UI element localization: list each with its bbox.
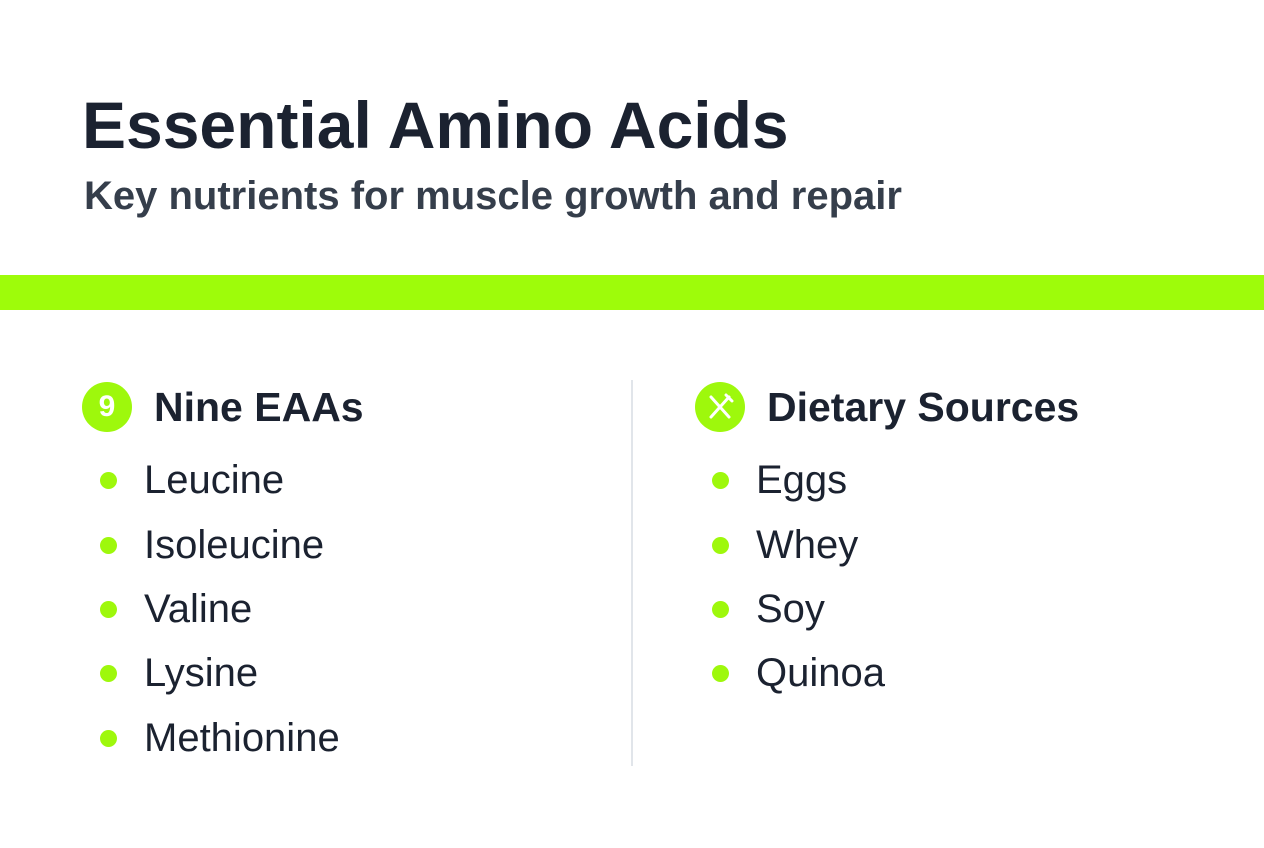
list: amino acids: Isoleucine — [144, 523, 324, 567]
heading: Nine EAAs: Nine EAAs — [154, 384, 364, 430]
heading: Dietary Sources: Dietary Sources — [767, 384, 1079, 430]
panel: nine EAAs — [82, 382, 364, 760]
list: sources: Quinoa — [756, 651, 885, 695]
list: amino acids: Methionine — [144, 716, 340, 760]
list: sources: Soy — [756, 587, 825, 631]
list: amino acids: Valine — [144, 587, 252, 631]
green band — [0, 275, 1264, 310]
panel: dietary sources — [695, 382, 1079, 695]
title: Essential Amino Acids — [82, 88, 789, 162]
list: amino acids: Leucine — [144, 458, 284, 502]
list: amino acids: Lysine — [144, 651, 258, 695]
icon: number 9 — [82, 382, 132, 432]
list: sources: Whey — [756, 523, 858, 567]
list: sources: Eggs — [756, 458, 847, 502]
icon: number 9: 9 — [99, 390, 115, 423]
subtitle: Key nutrients for muscle growth and repair — [84, 174, 902, 218]
icon: fork and knife — [695, 382, 745, 432]
list: sources — [712, 458, 885, 695]
divider — [631, 380, 633, 766]
list: amino acids — [100, 458, 340, 760]
